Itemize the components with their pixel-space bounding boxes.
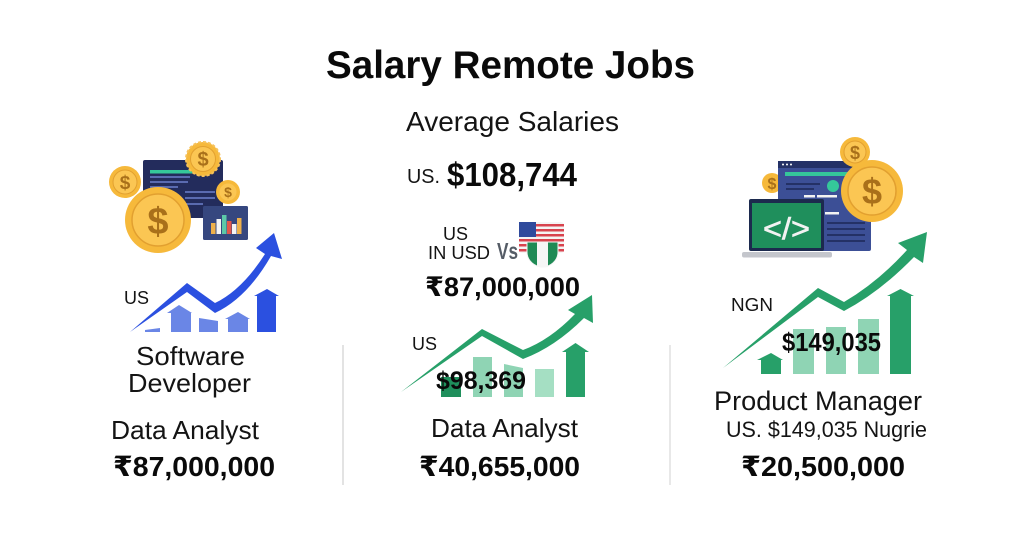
salary note: US. $149,035 Nugrie: [726, 417, 927, 442]
label: US in USD: US: [443, 224, 468, 244]
label: data analyst: Data Analyst: [111, 415, 260, 445]
bar chart: green: [441, 343, 589, 397]
value: ₹87,000,000: [113, 451, 275, 482]
label: US in USD: IN USD: [428, 243, 490, 263]
subtitle: average salaries: Average Salaries: [406, 106, 619, 137]
panel: data analyst: [401, 222, 593, 482]
divider: [669, 345, 671, 485]
icon: monitor with coins: $: [147, 201, 169, 243]
job title: software developer: [128, 341, 251, 398]
bar chart: green: [757, 289, 914, 374]
value: ₹20,500,000: [741, 451, 905, 482]
panel: product manager: [714, 137, 927, 482]
arrow: green trend: [401, 295, 593, 392]
icon: laptop with code and coins: [742, 137, 903, 258]
label: US in USD: [428, 224, 490, 263]
arrow: blue trend: [130, 233, 282, 332]
bar chart: blue: [145, 289, 279, 332]
headline US average salary: $108,744: [447, 156, 578, 193]
divider: [342, 345, 344, 485]
job title: software developer: Software: [136, 341, 245, 371]
job title: product manager: Product Manager: [714, 386, 922, 416]
label: US: US: [412, 334, 437, 354]
value overlay: $149,035: [782, 327, 881, 357]
icon: monitor with coins: [109, 142, 248, 253]
icon: vs flags: Vs: [497, 238, 518, 264]
value overlay: $98,369: [436, 367, 526, 395]
icon: monitor with coins: $: [197, 149, 209, 171]
icon: laptop with code and coins: $: [850, 143, 860, 163]
icon: laptop with code and coins: </>: [763, 211, 810, 246]
icon: monitor with coins: $: [120, 173, 131, 194]
label: US: US: [124, 288, 149, 308]
label: NGN: NGN: [731, 295, 773, 315]
headline US average salary: US.: [407, 166, 440, 188]
label: data analyst: Data Analyst: [431, 413, 579, 443]
icon: laptop with code and coins: $: [768, 176, 777, 193]
arrow: green trend: [723, 232, 927, 368]
title: Salary Remote Jobs: [326, 44, 695, 87]
icon: vs flags: [497, 222, 564, 267]
value: comparison: ₹87,000,000: [425, 272, 580, 302]
value: ₹40,655,000: [419, 451, 580, 482]
icon: laptop with code and coins: $: [862, 171, 882, 212]
panel: software developer: [109, 142, 282, 482]
job title: software developer: Developer: [128, 368, 251, 398]
icon: monitor with coins: $: [224, 184, 232, 200]
